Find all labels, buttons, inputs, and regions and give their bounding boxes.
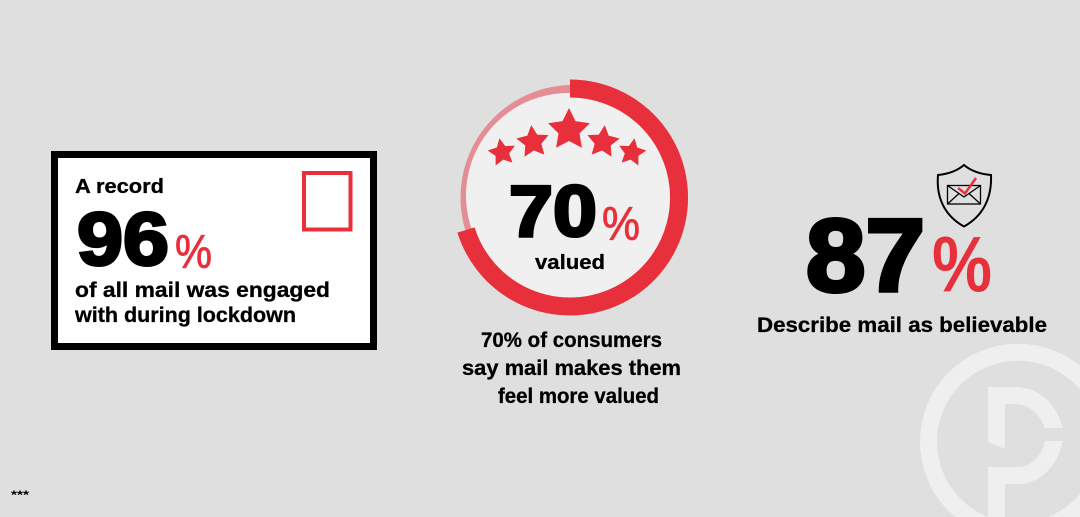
icon: five stars <box>486 108 648 166</box>
text: engagement description <box>74 279 330 327</box>
watermark logo <box>928 352 1080 517</box>
panel: 96% postcard <box>54 154 374 346</box>
text: valued: valued <box>535 252 605 274</box>
icon: shield with envelope <box>938 165 991 226</box>
stat: 96: 96 <box>77 197 169 281</box>
text: consumers description <box>462 329 681 408</box>
stat: percent sign: % <box>932 220 992 308</box>
text: consumers description: 70% of consumers <box>481 329 662 352</box>
text: consumers description: say mail makes them <box>462 357 681 380</box>
icon: stamp outline <box>304 173 350 230</box>
stat: percent sign: % <box>175 224 212 278</box>
footnote: *** <box>11 488 29 502</box>
text: engagement description: of all mail was engaged <box>75 279 330 302</box>
stat: 70: 70 <box>509 172 597 252</box>
stat: percent sign: % <box>602 196 640 250</box>
text: consumers description: feel more valued <box>498 385 659 408</box>
text: a record: A record <box>75 176 164 198</box>
text: believable description: Describe mail as believable <box>757 314 1047 337</box>
chart: 70% donut <box>460 85 686 310</box>
text: engagement description: with during lockdown <box>74 304 296 327</box>
stat: 87: 87 <box>806 198 925 313</box>
